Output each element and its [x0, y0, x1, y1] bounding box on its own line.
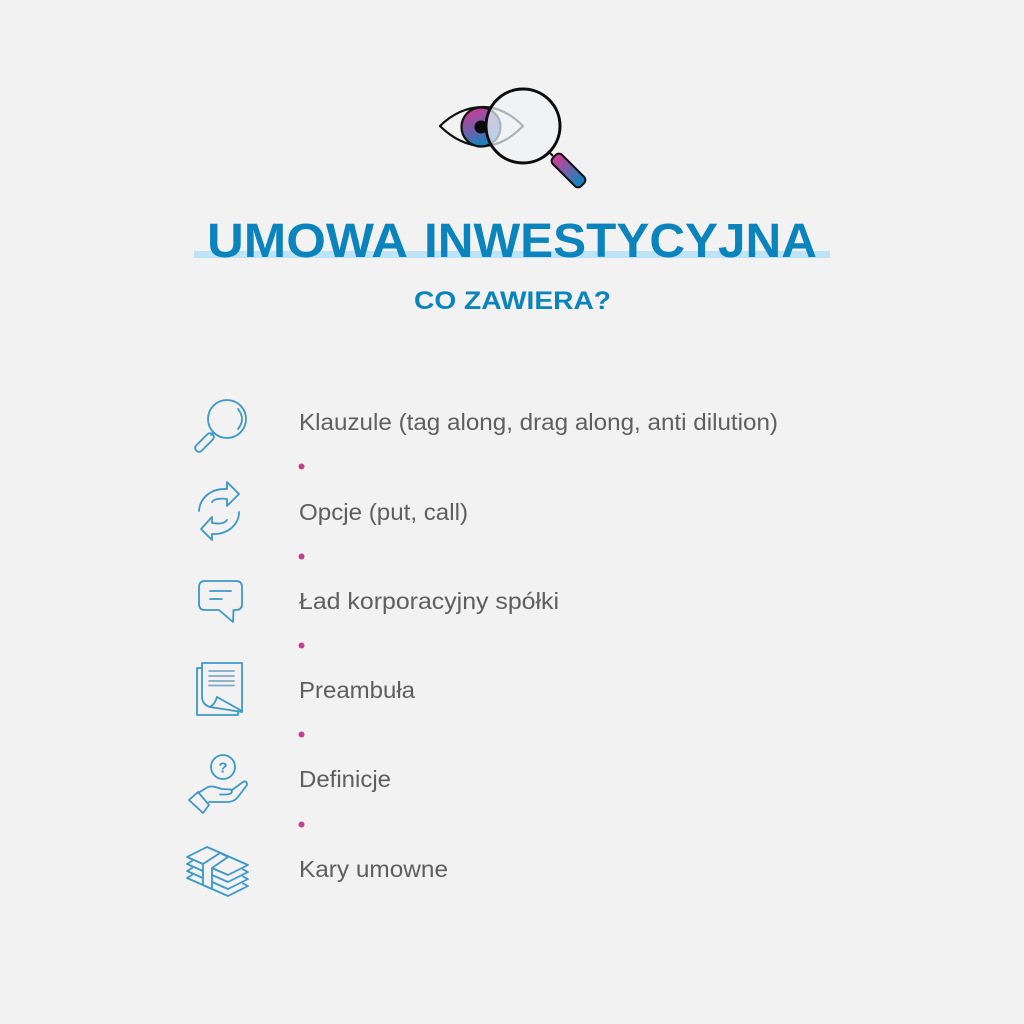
title: INWESTYCYJNA [424, 215, 817, 268]
item text: preamble: Preambuła [299, 677, 415, 703]
icon: document [197, 663, 242, 715]
title [207, 215, 817, 268]
icon: exchange arrows [199, 482, 239, 540]
title: UMOWA [207, 215, 408, 268]
icon: magnifier [194, 400, 246, 453]
item text: corporate governance: Ład korporacyjny spółki [299, 588, 559, 614]
item text: contractual penalties: Kary umowne [299, 856, 448, 882]
icon: stack of banknotes [187, 847, 248, 896]
icon: hand with question mark [189, 755, 247, 813]
separator dot [298, 642, 304, 648]
separator dot [298, 732, 304, 738]
separator dot [298, 464, 304, 470]
item text: clauses: Klauzule (tag along, drag along, anti dilution) [299, 409, 778, 435]
icon: eye under magnifying glass [440, 89, 587, 189]
item text: options: Opcje (put, call) [299, 499, 468, 525]
icon: hand with question mark: ? [218, 760, 228, 776]
subtitle: CO ZAWIERA? [414, 287, 611, 315]
icon: speech bubble [199, 581, 242, 622]
separator dot [298, 554, 304, 560]
heading underline [194, 251, 830, 258]
item text: definitions: Definicje [299, 766, 391, 792]
separator dot [298, 822, 304, 828]
